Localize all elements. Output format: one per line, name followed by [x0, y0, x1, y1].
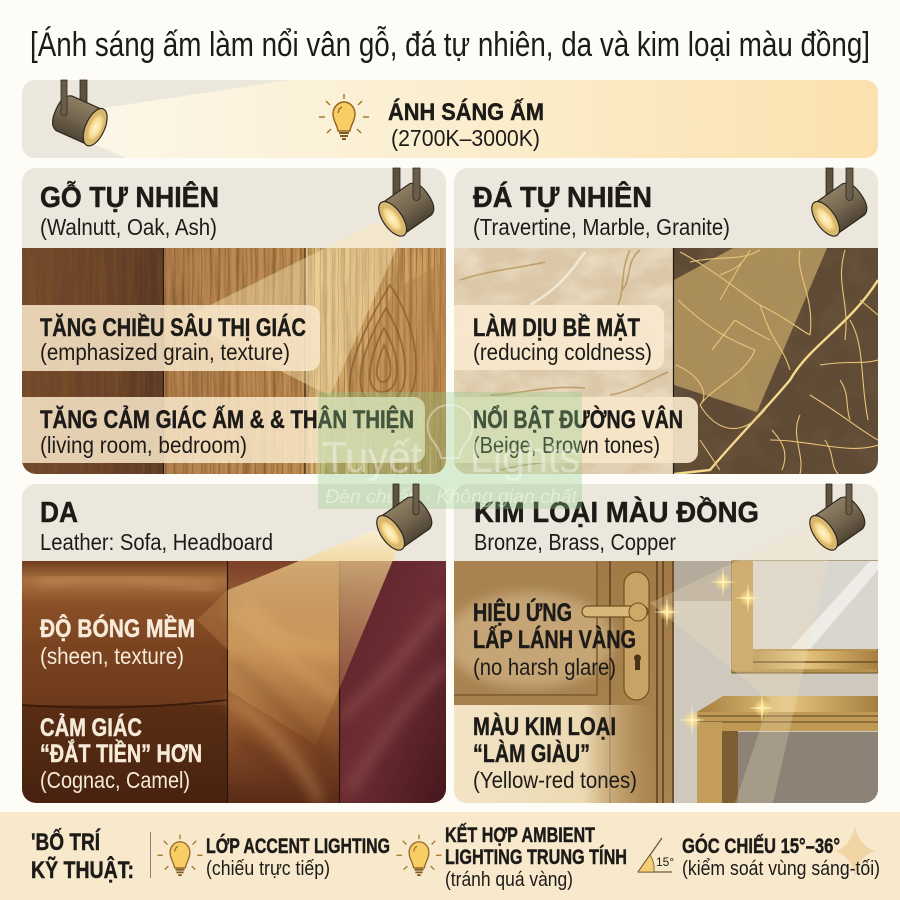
icon: bulb ambient — [396, 835, 442, 875]
subheading: wood: (Walnutt, Oak, Ash) — [40, 214, 217, 240]
item: beam angle: GÓC CHIẾU 15°–36° — [682, 834, 840, 858]
wood planks — [22, 248, 446, 474]
heading: leather: DA — [40, 497, 78, 529]
sparkles — [653, 566, 776, 736]
item: ambient lighting — [445, 824, 627, 891]
callout: softens surface: LÀM DỊU BỀ MẶT — [473, 313, 640, 342]
callout: soft sheen: (sheen, texture) — [40, 643, 184, 669]
callout: softens surface — [440, 305, 664, 370]
item: ambient lighting: LIGHTING TRUNG TÍNH — [445, 846, 627, 869]
banner subheading: (2700K–3000K) — [391, 125, 540, 151]
icon: light bulb — [319, 94, 369, 139]
callout: softens surface: (reducing coldness) — [473, 339, 652, 365]
banner heading: ÁNH SÁNG ẤM — [388, 98, 544, 126]
callout: more expensive feel: “ĐẮT TIỀN” HƠN — [40, 738, 202, 768]
item: beam angle — [682, 834, 880, 880]
subheading: leather: Leather: Sofa, Headboard — [40, 529, 273, 555]
light beam — [210, 222, 402, 396]
item: ambient lighting: KẾT HỢP AMBIENT — [445, 824, 595, 847]
subheading: bronze metal: Bronze, Brass, Copper — [474, 529, 676, 555]
light beam — [650, 527, 830, 803]
leather swatches — [22, 561, 446, 803]
callout: enriching metal color: (Yellow-red tones) — [473, 767, 637, 793]
watermark: Đèn chuẩn · Không gian chất — [325, 487, 578, 508]
panel: warm light banner — [22, 80, 878, 158]
footer label: 'BỐ TRÍ — [31, 828, 101, 856]
callout: visual depth: (emphasized grain, texture) — [40, 339, 290, 365]
item: ambient lighting: (tránh quá vàng) — [445, 869, 573, 891]
callout: more expensive feel: CẢM GIÁC — [40, 712, 142, 742]
icon: bulb accent — [158, 835, 202, 875]
heading: bronze metal: KIM LOẠI MÀU ĐỒNG — [474, 495, 759, 529]
icon: beam angle — [638, 838, 674, 872]
icon: track spotlight banner — [48, 80, 112, 149]
callout: golden sparkle: (no harsh glare) — [473, 654, 616, 680]
subheading: stone: (Travertine, Marble, Granite) — [473, 214, 730, 240]
item: accent lighting: LỚP ACCENT LIGHTING — [206, 834, 390, 858]
icon: spotlight metal — [804, 484, 870, 555]
callout: warmth: (living room, bedroom) — [40, 432, 247, 458]
callout: golden sparkle: HIỆU ỨNG — [473, 597, 572, 627]
callout: golden sparkle — [473, 597, 636, 680]
icon: spotlight leather — [371, 484, 437, 555]
callout: enriching metal color: MÀU KIM LOẠI — [473, 712, 616, 741]
callout: golden sparkle: LẤP LÁNH VÀNG — [473, 625, 636, 654]
callout: visual depth: TĂNG CHIỀU SÂU THỊ GIÁC — [40, 312, 306, 342]
callout: enriching metal color — [473, 712, 637, 793]
item: beam angle: (kiểm soát vùng sáng-tối) — [682, 858, 880, 880]
footer label — [31, 828, 134, 884]
panel: bronze metal — [445, 484, 878, 803]
watermark: Lights — [470, 433, 580, 482]
callout: veins stand out — [440, 397, 698, 463]
callout: more expensive feel: (Cognac, Camel) — [40, 767, 190, 793]
watermark: Tuyết — [322, 433, 422, 482]
icon: sparkle — [835, 826, 875, 876]
item: accent lighting — [206, 834, 390, 880]
callout: veins stand out: NỔI BẬT ĐƯỜNG VÂN — [473, 404, 683, 434]
item: accent lighting: (chiếu trực tiếp) — [206, 858, 330, 880]
panel: technical layout footer — [0, 812, 900, 900]
callout: soft sheen — [40, 613, 195, 669]
icon: spotlight wood — [373, 168, 439, 241]
panel: leather — [22, 484, 446, 803]
heading: wood: GỖ TỰ NHIÊN — [40, 180, 219, 214]
icon: beam angle: 15° — [656, 855, 674, 869]
callout: warmth — [10, 397, 425, 463]
light beam — [228, 530, 398, 745]
icon: spotlight stone — [806, 168, 872, 241]
callout: visual depth — [10, 305, 320, 371]
panel: natural wood — [10, 168, 446, 474]
watermark — [318, 392, 582, 509]
marble slabs — [454, 248, 878, 474]
callout: warmth: TĂNG CẢM GIÁC ẤM & & THÂN THIỆN — [40, 404, 414, 434]
callout: soft sheen: ĐỘ BÓNG MỀM — [40, 613, 195, 643]
heading: stone: ĐÁ TỰ NHIÊN — [473, 180, 652, 214]
door, mirror and console scene — [445, 561, 878, 803]
callout: veins stand out: (Beige, Brown tones) — [473, 432, 660, 458]
callout: enriching metal color: “LÀM GIÀU” — [473, 739, 590, 768]
callout: more expensive feel — [40, 712, 202, 793]
footer label: KỸ THUẬT: — [31, 856, 134, 884]
panel: natural stone — [440, 168, 878, 474]
